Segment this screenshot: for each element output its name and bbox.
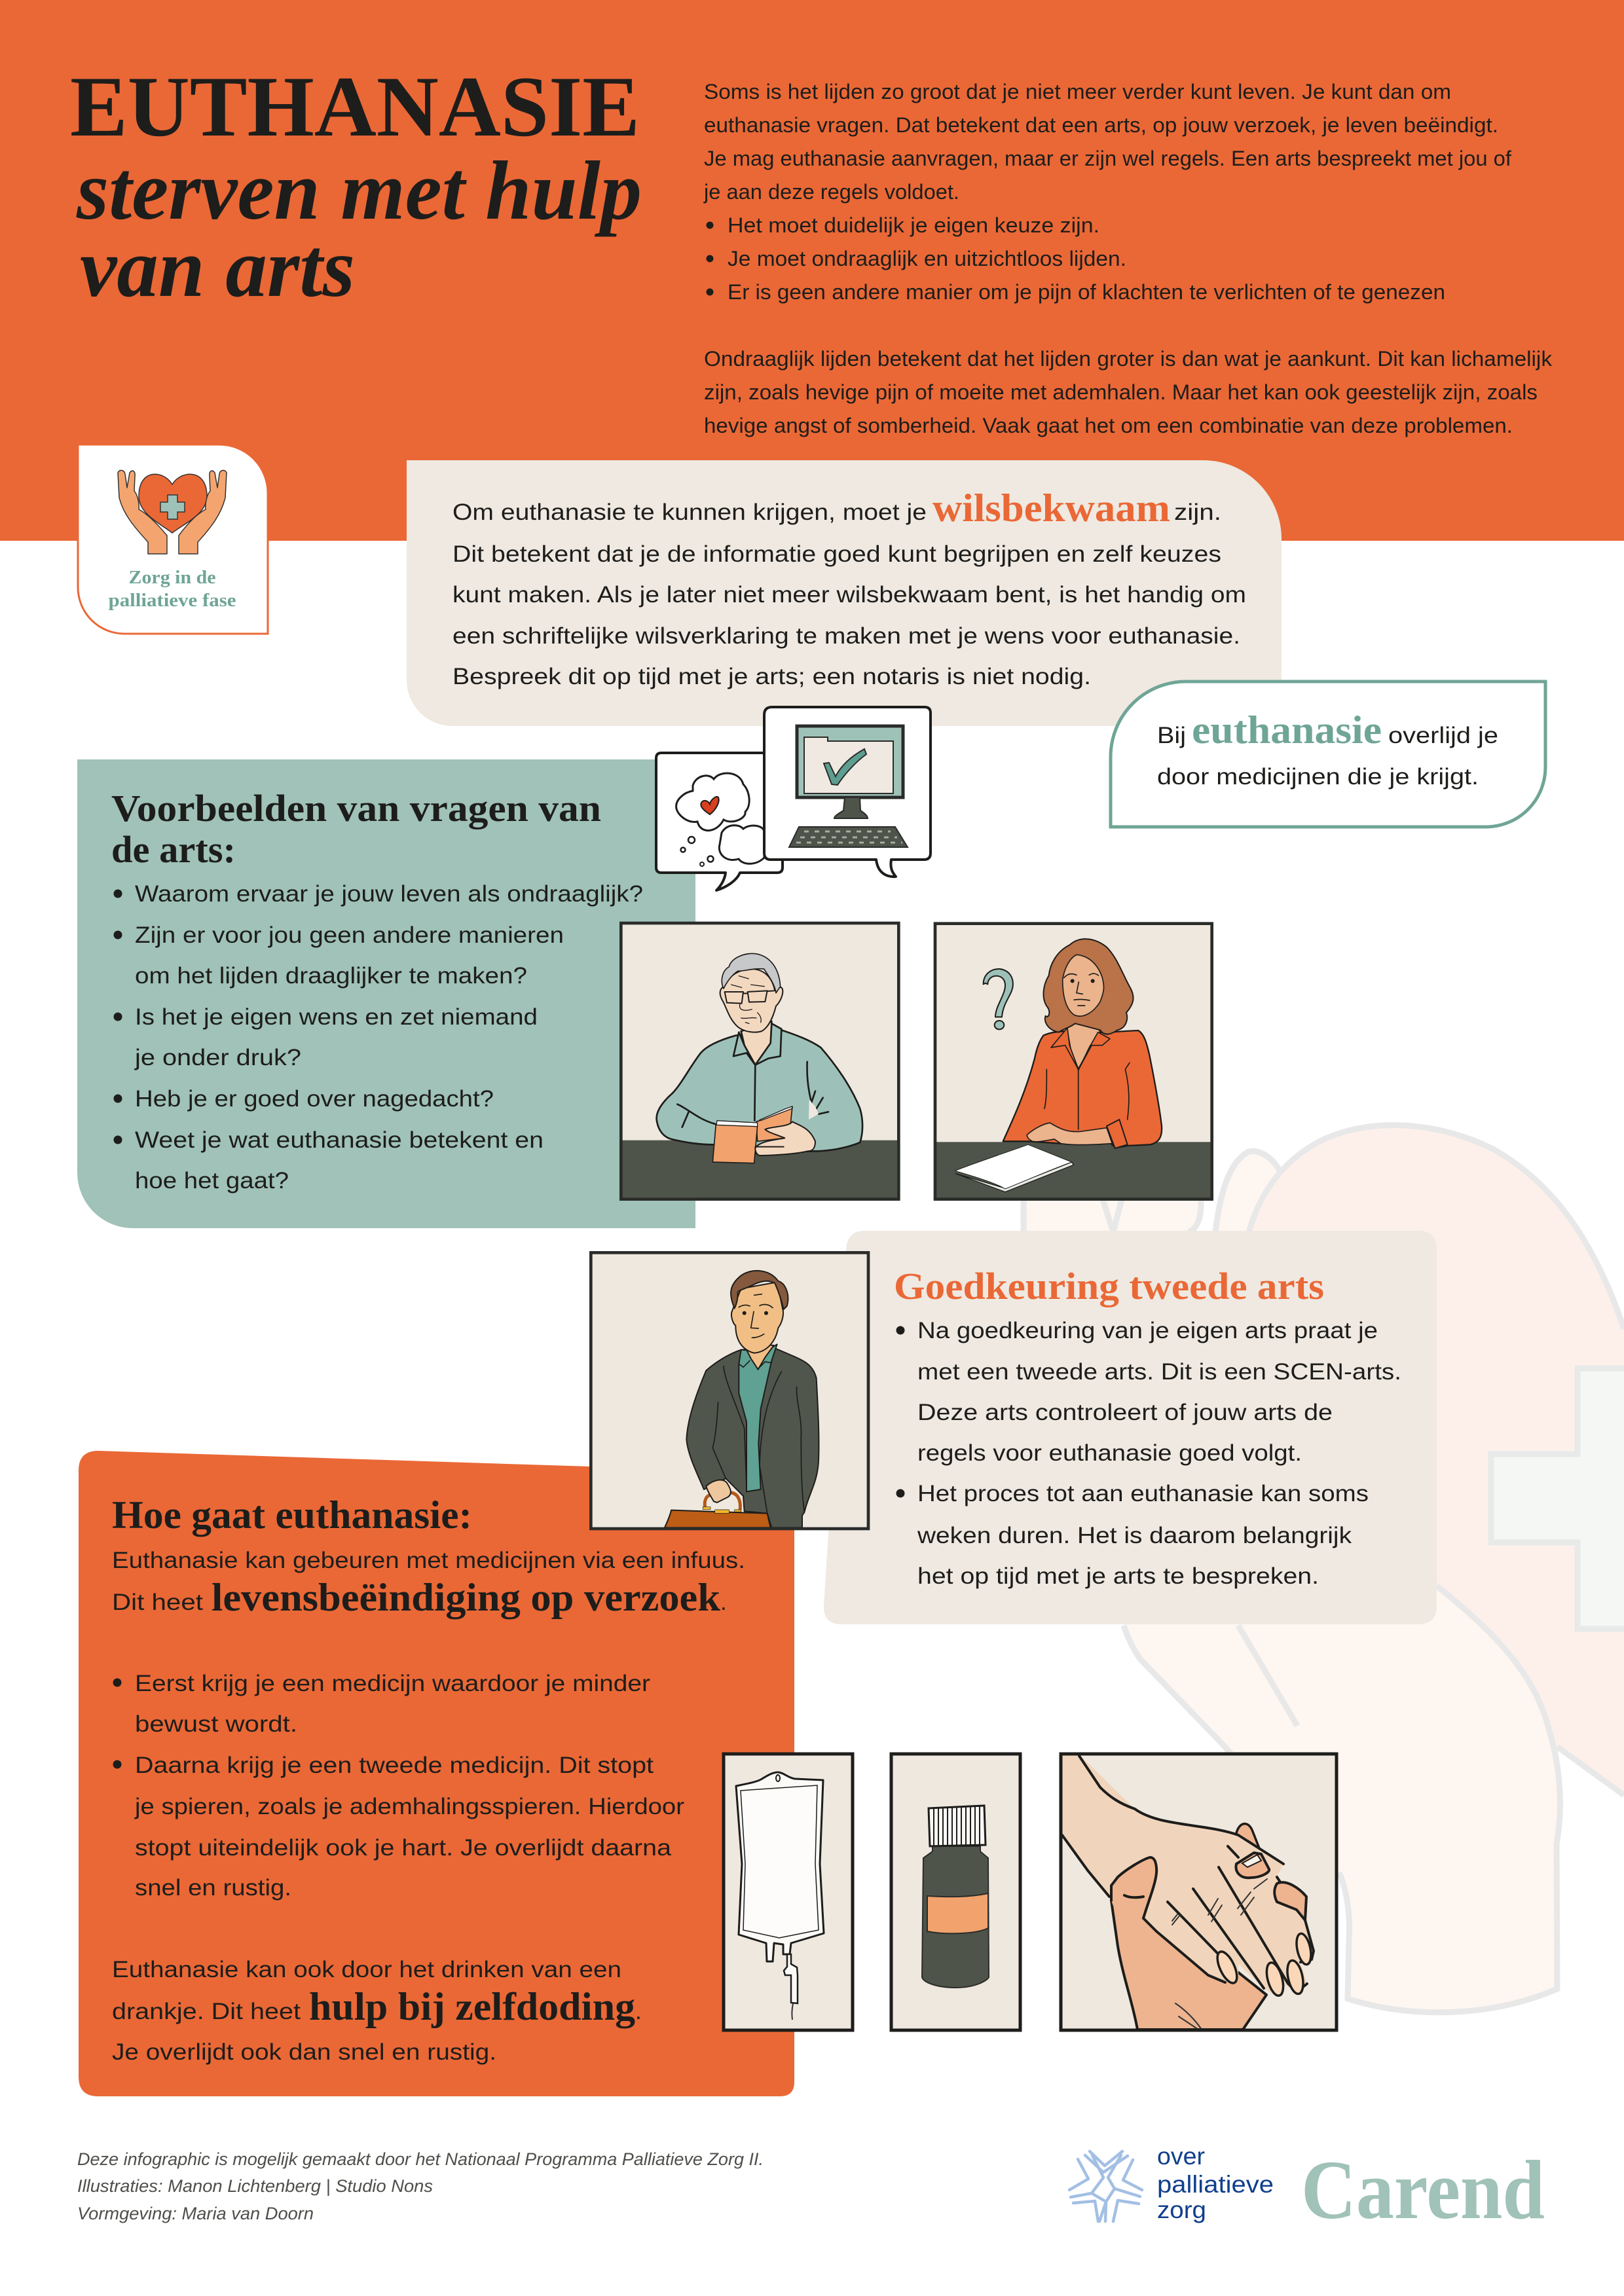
panel: wilsbekwaam: wilsbekwaam [932, 486, 1170, 530]
panel: hoe gaat euthanasie: levensbeëindiging op verzoek [212, 1576, 721, 1619]
panel: voorbeelden van vragen: Weet je wat euthanasie betekent en [135, 1127, 544, 1153]
callout: bij euthanasie: door medicijnen die je krijgt. [1157, 764, 1479, 790]
intro text block [703, 80, 1553, 437]
illustration: older man reading [621, 923, 898, 1199]
intro text block: Je moet ondraaglijk en uitzichtloos lijden. [728, 247, 1126, 270]
panel: goedkeuring tweede arts: Goedkeuring tweede arts [894, 1265, 1324, 1307]
panel: voorbeelden van vragen [77, 759, 695, 1228]
panel: wilsbekwaam: Dit betekent dat je de informatie goed kunt begrijpen en zelf keuzes [452, 541, 1221, 567]
panel: voorbeelden van vragen: Is het je eigen wens en zet niemand [135, 1004, 538, 1030]
panel: hoe gaat euthanasie: je spieren, zoals je ademhalingsspieren. Hierdoor [134, 1794, 684, 1819]
panel: goedkeuring tweede arts: Het proces tot aan euthanasie kan soms [917, 1481, 1369, 1506]
panel: hoe gaat euthanasie [79, 1451, 794, 2096]
intro text block: hevige angst of somberheid. Vaak gaat het om een combinatie van deze problemen. [704, 414, 1513, 437]
intro text block: Het moet duidelijk je eigen keuze zijn. [728, 213, 1099, 237]
panel: wilsbekwaam: Bespreek dit op tijd met je arts; een notaris is niet nodig. [452, 664, 1091, 689]
panel: hoe gaat euthanasie: stopt uiteindelijk ook je hart. Je overlijdt daarna [135, 1835, 672, 1861]
panel: goedkeuring tweede arts: Na goedkeuring van je eigen arts praat je [917, 1318, 1378, 1343]
logo: over palliatieve zorg [1069, 2143, 1274, 2223]
intro text block: euthanasie vragen. Dat betekent dat een arts, op jouw verzoek, je leven beëindigt. [704, 113, 1498, 137]
footer credits: Deze infographic is mogelijk gemaakt door het Nationaal Programma Palliatieve Zorg II. [77, 2149, 764, 2169]
panel: hoe gaat euthanasie: snel en rustig. [135, 1875, 291, 1901]
panel: wilsbekwaam [407, 460, 1282, 726]
illustration: infusion bag [724, 1754, 853, 2030]
intro text block: Je mag euthanasie aanvragen, maar er zijn wel regels. Een arts bespreekt met jou of [704, 147, 1511, 170]
illustration: medicine bottle [891, 1754, 1020, 2030]
panel: wilsbekwaam: een schriftelijke wilsverklaring te maken met je wens voor euthanasie. [452, 623, 1240, 649]
footer credits: Illustraties: Manon Lichtenberg | Studio Nons [77, 2176, 433, 2196]
panel: voorbeelden van vragen: de arts: [111, 828, 236, 871]
callout: bij euthanasie: euthanasie [1192, 708, 1382, 752]
illustration: woman doctor with question mark [935, 924, 1212, 1199]
intro text block: Er is geen andere manier om je pijn of klachten te verlichten of te genezen [728, 280, 1445, 304]
callout: bij euthanasie: Bij [1157, 723, 1186, 748]
panel: wilsbekwaam: Om euthanasie te kunnen krijgen, moet je [452, 500, 927, 525]
panel: hoe gaat euthanasie: Euthanasie kan ook door het drinken van een [112, 1957, 621, 1982]
panel: hoe gaat euthanasie: drankje. Dit heet [112, 1999, 301, 2024]
panel: wilsbekwaam: zijn. [1174, 500, 1221, 525]
logo card: zorg in de palliatieve fase [78, 445, 268, 634]
icon: hands holding heart with cross [118, 470, 227, 554]
panel: goedkeuring tweede arts: regels voor euthanasie goed volgt. [917, 1440, 1302, 1466]
panel: hoe gaat euthanasie: bewust wordt. [135, 1711, 297, 1737]
panel: goedkeuring tweede arts: weken duren. Het is daarom belangrijk [917, 1523, 1352, 1548]
panel: voorbeelden van vragen: Zijn er voor jou geen andere manieren [135, 922, 564, 948]
panel: goedkeuring tweede arts: Deze arts controleert of jouw arts de [917, 1400, 1333, 1425]
callout: bij euthanasie: overlijd je [1388, 723, 1498, 748]
logo card: zorg in de palliatieve fase: Zorg in de [128, 567, 216, 588]
panel: hoe gaat euthanasie: Daarna krijg je een tweede medicijn. Dit stopt [135, 1753, 654, 1778]
illustration: second doctor with briefcase [591, 1252, 868, 1529]
panel: goedkeuring tweede arts [824, 1231, 1437, 1624]
header band [0, 0, 1624, 541]
panel: voorbeelden van vragen: Waarom ervaar je jouw leven als ondraaglijk? [135, 881, 643, 907]
callout: bij euthanasie [1111, 682, 1545, 827]
footer credits [77, 2149, 764, 2223]
intro text block: Soms is het lijden zo groot dat je niet meer verder kunt leven. Je kunt dan om [704, 80, 1451, 103]
panel: voorbeelden van vragen: Heb je er goed over nagedacht? [135, 1086, 494, 1112]
panel: goedkeuring tweede arts: met een tweede arts. Dit is een SCEN-arts. [917, 1359, 1401, 1385]
logo card: zorg in de palliatieve fase: palliatieve fase [109, 590, 236, 611]
logo: over palliatieve zorg: over [1157, 2143, 1205, 2170]
panel: voorbeelden van vragen: je onder druk? [134, 1045, 301, 1070]
panel: hoe gaat euthanasie: Hoe gaat euthanasie: [112, 1493, 472, 1537]
title: van arts [80, 221, 355, 314]
logo: over palliatieve zorg: zorg [1157, 2196, 1206, 2223]
background watermark: hands holding heart [1024, 1125, 1624, 2013]
panel: hoe gaat euthanasie: . [720, 1590, 727, 1615]
panel: hoe gaat euthanasie: Je overlijdt ook dan snel en rustig. [112, 2039, 496, 2065]
intro text block: je aan deze regels voldoet. [703, 180, 959, 204]
panel: voorbeelden van vragen: om het lijden draaglijker te maken? [135, 963, 527, 989]
panel: voorbeelden van vragen: hoe het gaat? [135, 1168, 289, 1194]
panel: wilsbekwaam: kunt maken. Als je later niet meer wilsbekwaam bent, is het handig om [452, 582, 1246, 608]
icon: thought bubble with heart [656, 753, 783, 890]
panel: hoe gaat euthanasie: Euthanasie kan gebeuren met medicijnen via een infuus. [112, 1548, 745, 1573]
panel: voorbeelden van vragen: Voorbeelden van vragen van [111, 787, 601, 829]
logo: Carend: Carend [1301, 2143, 1545, 2236]
panel: goedkeuring tweede arts: het op tijd met je arts te bespreken. [917, 1563, 1319, 1589]
title: sterven met hulp [76, 144, 642, 237]
illustration: holding hands [1061, 1754, 1337, 2030]
title [70, 58, 642, 314]
logo: over palliatieve zorg: palliatieve [1157, 2171, 1274, 2198]
panel: hoe gaat euthanasie: . [635, 1999, 642, 2024]
panel: hoe gaat euthanasie: Dit heet [112, 1590, 203, 1615]
panel: hoe gaat euthanasie: Eerst krijg je een medicijn waardoor je minder [135, 1671, 650, 1696]
intro text block: zijn, zoals hevige pijn of moeite met ademhalen. Maar het kan ook geestelijk zijn, zoals [704, 380, 1538, 404]
footer credits: Vormgeving: Maria van Doorn [77, 2204, 314, 2223]
title: EUTHANASIE [70, 58, 640, 155]
intro text block: Ondraaglijk lijden betekent dat het lijden groter is dan wat je aankunt. Dit kan lichamelijk [704, 347, 1553, 371]
panel: hoe gaat euthanasie: hulp bij zelfdoding [309, 1985, 635, 2028]
icon: speech bubble with computer [764, 707, 931, 877]
